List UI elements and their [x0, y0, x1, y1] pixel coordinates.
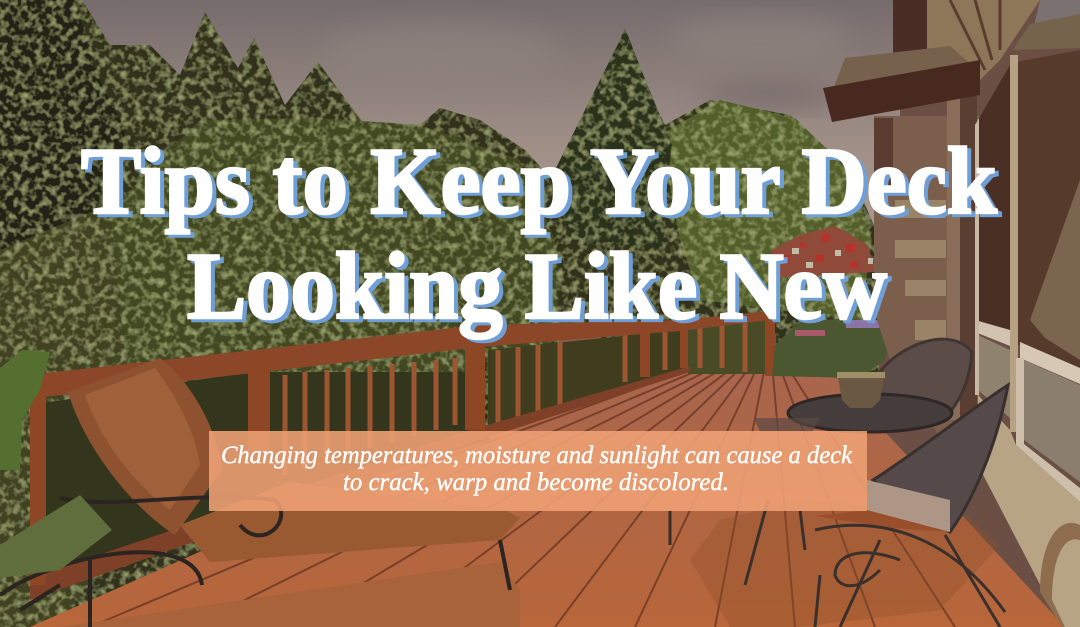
- front chair seat: [867, 480, 950, 532]
- upper right roof: [1013, 14, 1080, 50]
- window one: [975, 65, 1010, 330]
- clouds: [320, 16, 850, 109]
- upper siding: [893, 0, 927, 54]
- title text: Tips to Keep Your Deck: [81, 128, 997, 234]
- pot: [837, 372, 885, 408]
- potted flowers right: [772, 318, 896, 378]
- sky: [0, 0, 900, 300]
- chair legs: [670, 500, 1005, 627]
- awning roof: [832, 46, 980, 100]
- deck floor: [30, 368, 1065, 627]
- lounge chair: [0, 350, 520, 627]
- ottoman: [60, 562, 520, 627]
- subtitle text: Changing temperatures, moisture and sunlight can cause a deck: [221, 442, 853, 469]
- title: [81, 128, 1001, 342]
- back chair: [880, 339, 972, 412]
- title shadow: Tips to Keep Your Deck: [85, 131, 1001, 237]
- foreground foliage left: [0, 350, 50, 470]
- subtitle text: to crack, warp and become discolored.: [343, 469, 729, 496]
- wall: [874, 116, 980, 470]
- lower siding: [978, 395, 1080, 627]
- seat cushion: [180, 482, 520, 562]
- window trim: [1010, 55, 1018, 432]
- iron frame: [0, 497, 510, 627]
- front chair back: [873, 385, 1008, 532]
- deck boards: [102, 374, 956, 627]
- banner background: [209, 431, 867, 511]
- back cushion: [68, 358, 222, 535]
- title text: Looking Like New: [187, 233, 887, 339]
- house wall and roof: [823, 0, 1080, 627]
- table and chairs: [670, 339, 1008, 627]
- subtitle banner: [209, 431, 867, 511]
- deck railing: [0, 311, 775, 600]
- table: [788, 394, 952, 432]
- window two: [1016, 50, 1080, 370]
- potted flowers centre: [558, 322, 602, 354]
- sky at top right: [1034, 0, 1080, 26]
- flowers at railing: [558, 226, 875, 422]
- title shadow: Looking Like New: [191, 236, 891, 342]
- red flower bush: [772, 226, 875, 278]
- table shadow on deck: [690, 500, 1000, 627]
